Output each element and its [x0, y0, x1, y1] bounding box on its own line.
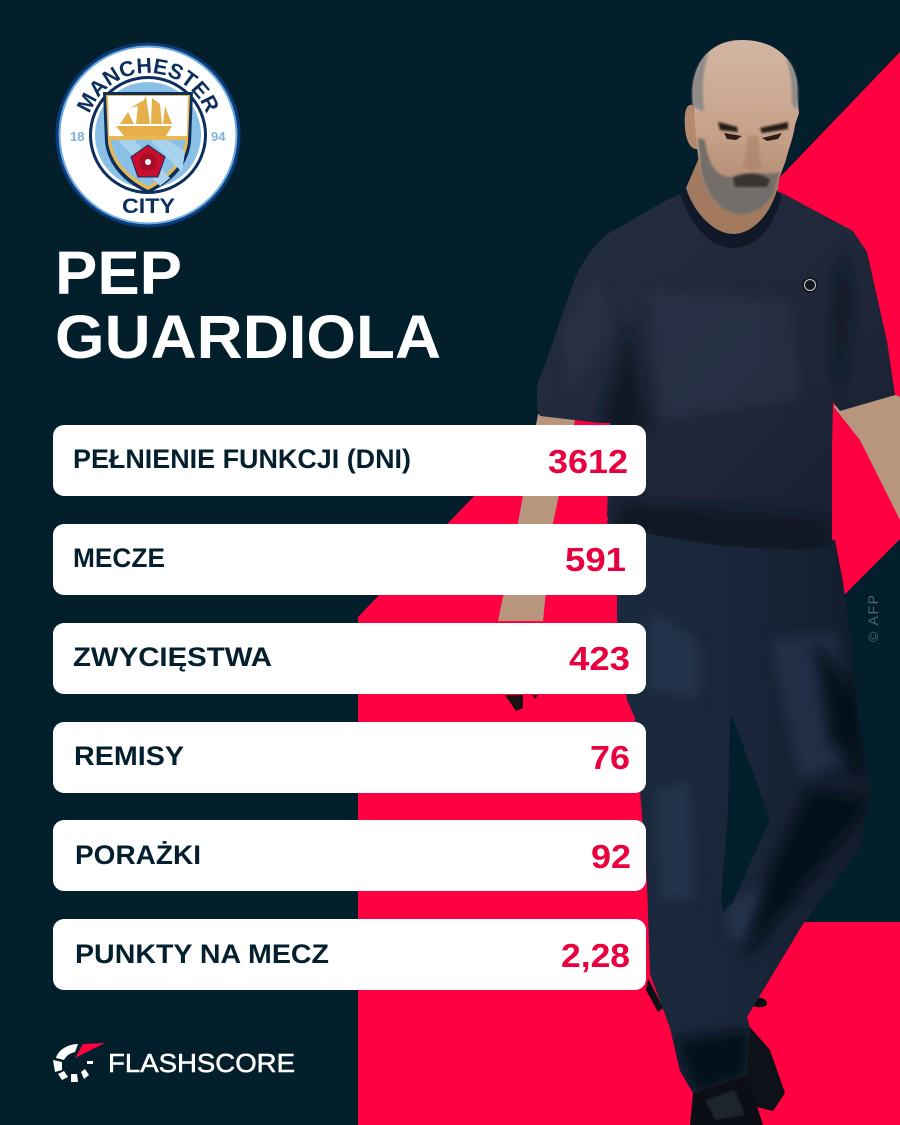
crest text: MANCHESTER — [76, 58, 218, 114]
label: PORAŻKI — [75, 840, 201, 870]
left hand fingers — [505, 695, 538, 711]
value: 591 — [565, 541, 626, 578]
photo credit: © AFP — [865, 595, 881, 642]
stat row: matches — [53, 524, 646, 595]
heel and shoelace — [646, 978, 767, 1012]
stat row: points per match — [53, 919, 646, 990]
club crest: Manchester City — [56, 42, 240, 228]
label: REMISY — [74, 741, 184, 771]
sweater shading — [597, 266, 854, 549]
left arm — [498, 414, 575, 621]
ear — [685, 105, 698, 149]
head — [685, 40, 799, 214]
right arm — [833, 395, 900, 520]
crest year right: 94 — [211, 129, 226, 144]
label: PEŁNIENIE FUNKCJI (DNI) — [73, 444, 411, 474]
value: 3612 — [548, 443, 628, 480]
title — [55, 239, 441, 371]
front shoe — [690, 1075, 763, 1125]
rose — [131, 145, 165, 177]
stat row: losses — [53, 820, 646, 891]
label: ZWYCIĘSTWA — [73, 642, 272, 672]
sweater — [537, 192, 895, 560]
shield — [103, 92, 193, 193]
stat row: tenure — [53, 425, 646, 496]
head shape — [693, 40, 799, 214]
value: 76 — [590, 739, 630, 776]
photo: Pep Guardiola — [498, 40, 900, 1125]
stat row: draws — [53, 722, 646, 793]
value: 2,28 — [561, 937, 630, 974]
crest rings — [56, 42, 240, 228]
label: MECZE — [73, 543, 165, 573]
gap between legs — [721, 718, 770, 913]
ship — [116, 96, 172, 136]
eyebrows — [718, 122, 788, 133]
sweater badge — [802, 277, 818, 293]
nose — [742, 135, 762, 171]
logo wordmark: FLASHSCORE — [108, 1048, 295, 1078]
beard — [698, 138, 780, 214]
moustache and mouth — [733, 174, 770, 187]
eyes — [724, 133, 782, 141]
neck — [686, 160, 780, 234]
stat row: wins — [53, 623, 646, 694]
crest text city: CITY — [122, 195, 175, 218]
trousers — [607, 520, 870, 1094]
logo icon — [53, 1043, 105, 1082]
value: 92 — [591, 838, 631, 875]
rear shoe — [745, 1025, 785, 1111]
cropped hair at temples — [692, 52, 798, 112]
trouser shading — [648, 610, 868, 1094]
title line 2: GUARDIOLA — [55, 303, 441, 371]
label: PUNKTY NA MECZ — [75, 939, 329, 969]
red diagonal shape — [358, 52, 900, 1125]
crest year left: 18 — [70, 129, 84, 144]
title line 1: PEP — [55, 239, 182, 307]
value: 423 — [569, 640, 630, 677]
sweater collar — [680, 190, 781, 248]
flashscore logo — [53, 1043, 295, 1082]
